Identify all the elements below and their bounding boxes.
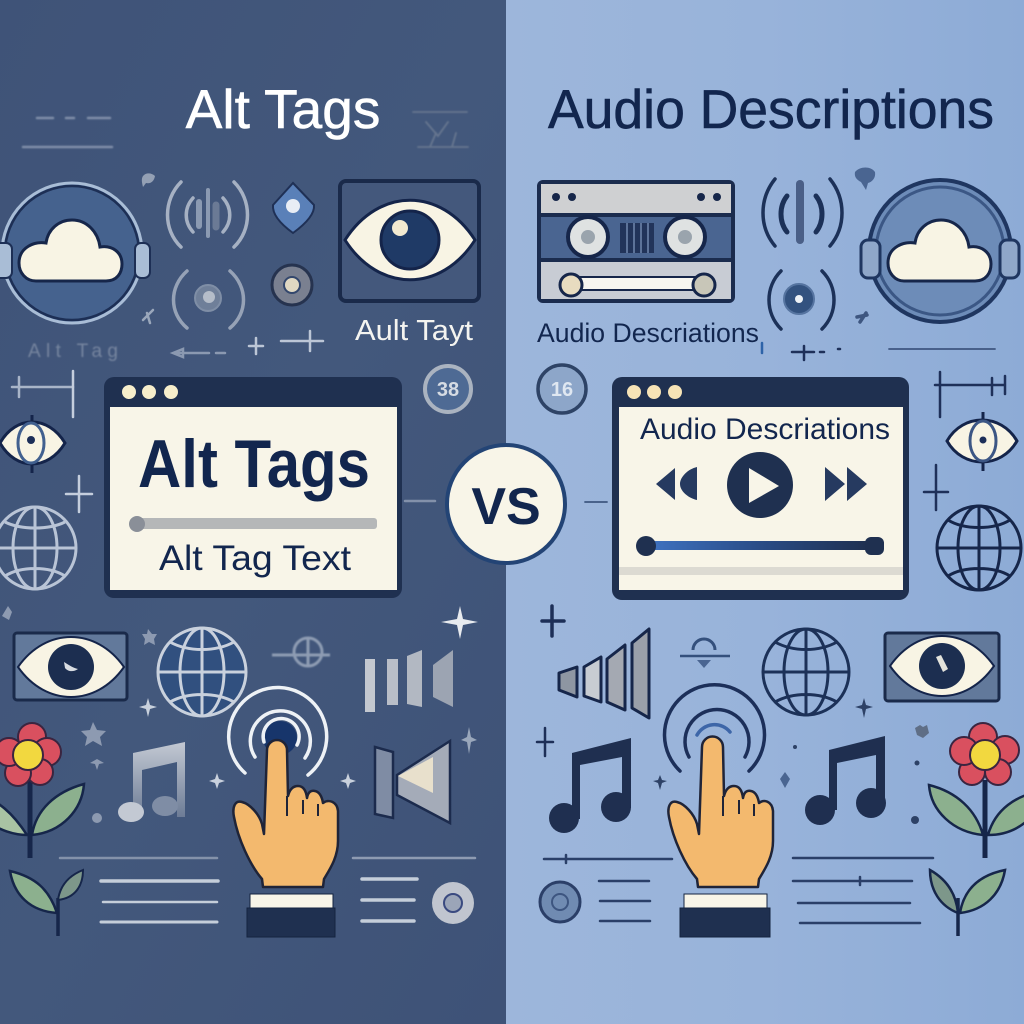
icon: right disc (540, 882, 580, 922)
decoration: left small marks row (143, 310, 323, 357)
icon: right sprout (930, 870, 1005, 936)
icon: left sprout (10, 870, 83, 936)
panel: audio descriptions background (506, 0, 1024, 1024)
label: ault tayt: Ault Tayt (355, 315, 473, 347)
icon: left eye small (0, 415, 65, 473)
text lines: right list (544, 855, 933, 923)
icon: right globe (937, 506, 1021, 590)
icon: right ripple (664, 685, 764, 771)
icon: left small star marks (2, 606, 157, 823)
icon: left slider key (272, 638, 330, 666)
icon: right sparkle marks (653, 698, 929, 824)
icon: left speck (142, 173, 155, 187)
icon: left flower (0, 723, 84, 858)
decoration: left bracket marks (12, 371, 435, 512)
badge: versus: VS (471, 478, 541, 536)
icon: left music note (118, 742, 185, 822)
icon: right record button: 16 (551, 379, 573, 401)
icon: fast forward (825, 467, 867, 501)
icon: right lower waves (769, 271, 834, 329)
icon: right music note two (805, 736, 886, 825)
progress bar (636, 536, 884, 556)
decoration: faded marks top left (23, 112, 468, 147)
icon: left pointing hand (233, 740, 338, 937)
text: alt tag text: Alt Tag Text (159, 539, 351, 578)
text: alt tags: Alt Tags (138, 426, 370, 502)
text lines: left list (60, 858, 475, 922)
icon: left ripple (229, 687, 327, 775)
icon: left sound waves (168, 182, 248, 247)
icon: right flower (929, 723, 1024, 858)
icon: right record button (538, 365, 586, 413)
heading: alt tags: Alt Tags (186, 78, 380, 140)
icon: left sparkles (139, 606, 478, 789)
icon: right key symbol (680, 639, 730, 668)
icon: left eye box (340, 181, 479, 301)
progress bar (129, 516, 377, 532)
icon: left record button (425, 366, 471, 412)
icon: cassette tape (537, 180, 735, 303)
badge: versus (447, 445, 565, 563)
icon: left speaker (375, 741, 450, 823)
icon: right pointing hand (668, 737, 773, 937)
panel: alt tags browser window (104, 377, 402, 598)
icon: left muted waves (174, 271, 244, 328)
icon: left disc (432, 882, 474, 924)
label: audio descriptions: Audio Descriations (537, 318, 759, 348)
label: faded alt tag: Alt Tag (28, 341, 118, 362)
decoration: right small marks (585, 313, 1005, 510)
icon: right sound waves (763, 179, 842, 246)
text: audio descriptions: Audio Descriations (640, 413, 890, 446)
icon: right eye box lower (885, 633, 999, 701)
icon: left diamond marker (273, 183, 314, 233)
heading: audio descriptions: Audio Descriptions (548, 78, 994, 140)
panel: alt tags background (0, 0, 506, 1024)
icon: right volume bars (559, 629, 649, 718)
icon: right headset cloud (861, 180, 1019, 322)
icon: right eye small (947, 412, 1017, 471)
decoration: right crosses (537, 606, 564, 756)
icon: left volume bars (365, 650, 453, 712)
icon: right music note one (549, 738, 631, 833)
icon: left globe (0, 507, 76, 589)
icon: left record button: 38 (437, 379, 459, 401)
icon: left eye box lower (14, 633, 127, 700)
icon: left headset cloud (0, 183, 150, 323)
icon: rewind (656, 467, 697, 500)
icon: left lower globe (158, 628, 246, 716)
icon: left circular button (272, 265, 312, 305)
icon: play button (727, 452, 793, 518)
panel: audio descriptions player window (612, 377, 909, 600)
icon: right lower globe (763, 629, 849, 715)
icon: right marker (855, 168, 875, 190)
